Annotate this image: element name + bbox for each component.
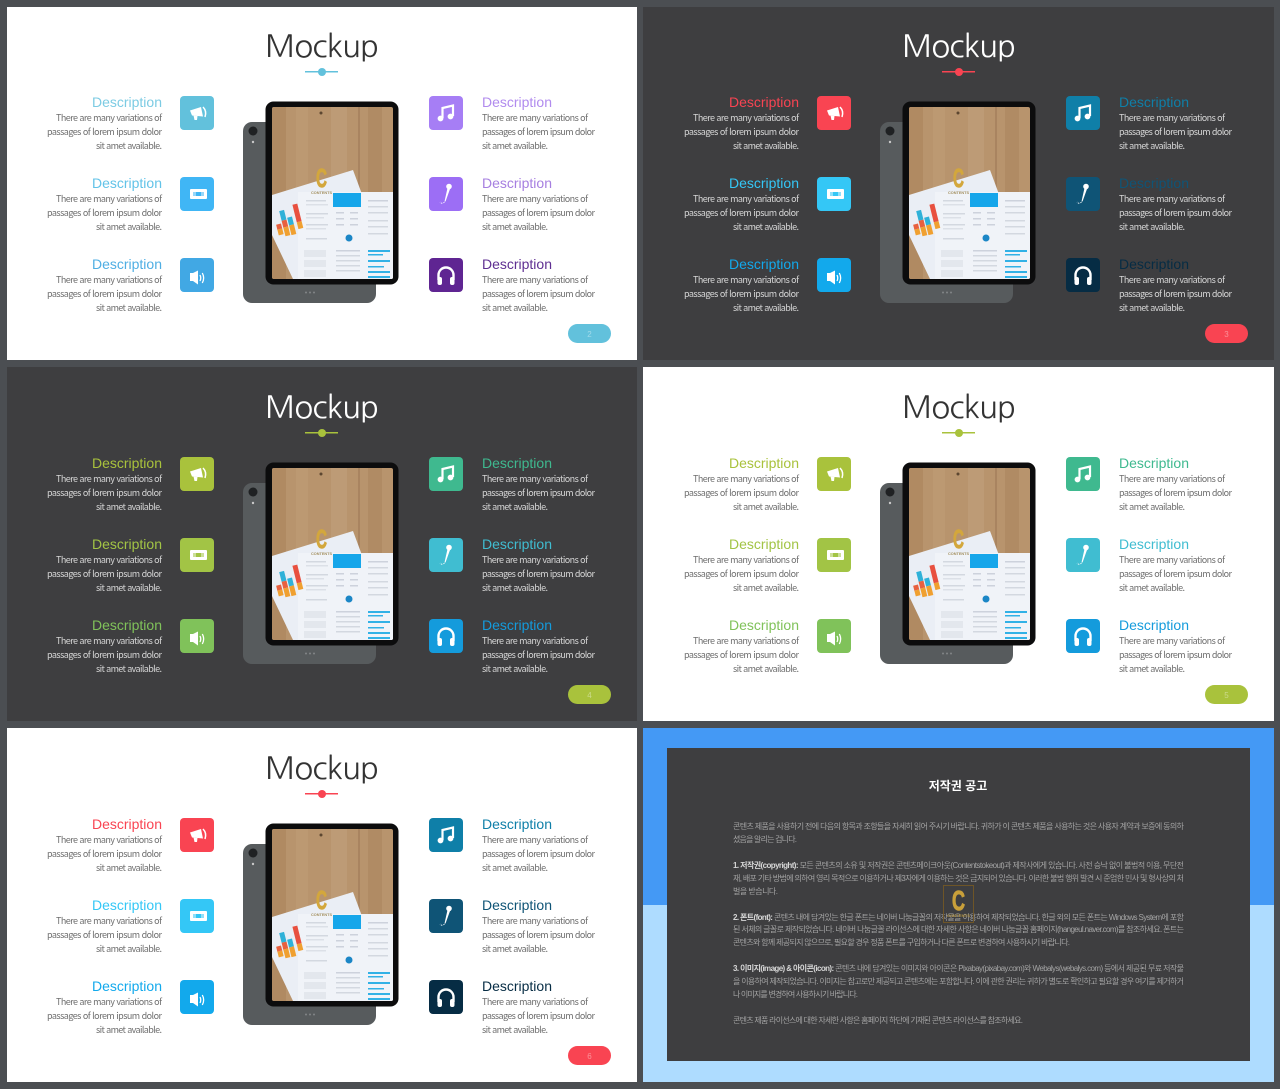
left item 1: sit amet available. [733,500,799,513]
title accent [942,68,975,76]
tablet mockup: C [316,524,327,554]
left item 3: passages of lorem ipsum dolor [47,648,162,661]
page number [1205,685,1248,704]
right item 3: sit amet available. [482,662,548,675]
left item 1: Description [729,455,799,471]
left item 2: Description [729,175,799,191]
icon: headphones [429,980,463,1014]
left item 1: Description [92,455,162,471]
font paragraph: 된 서체의 글꼴로 제작되었습니다. 네이버 나눔글꼴 라이선스에 대한 자세한 사항은 네이버 나눔글꼴 홈페이지(hangeul.naver.com)를 참조하세요. 폰트는 [733,924,1184,934]
tablet mockup: C [316,163,327,193]
right item 1: passages of lorem ipsum dolor [1119,486,1232,499]
right item 1: There are many variations of [1119,472,1226,485]
right item 2: Description [1119,175,1189,191]
left item 1 [684,455,800,513]
right item 2: sit amet available. [1119,581,1185,594]
right item 3 [1119,617,1232,675]
icon: headphones [429,619,463,653]
left item 2: There are many variations of [56,192,163,205]
icon: megaphone [180,818,214,852]
right item 1 [482,816,596,874]
left item 1: There are many variations of [693,472,800,485]
icon: speaker [180,980,214,1014]
left item 2: Description [92,536,162,552]
icon: megaphone [180,96,214,130]
right item 1: sit amet available. [482,500,548,513]
tablet mockup [243,102,398,303]
icon: microphone [429,899,463,933]
left item 1: sit amet available. [96,139,162,152]
icon: music note [429,818,463,852]
right item 1: There are many variations of [1119,111,1226,124]
left item 1: There are many variations of [56,833,163,846]
right item 2: There are many variations of [482,914,589,927]
logo watermark: CONTENTS [947,913,970,918]
left item 1: passages of lorem ipsum dolor [684,125,800,138]
right item 1: Description [482,816,552,832]
right item 2: There are many variations of [1119,192,1226,205]
right item 3: There are many variations of [482,273,589,286]
right item 3: passages of lorem ipsum dolor [482,1009,596,1022]
right item 3 [482,617,596,675]
font paragraph: 콘텐츠와 함께 제공되지 않으므로, 필요할 경우 정품 폰트를 구입하거나 다른 폰트로 변경하여 사용하시기 바랍니다. [733,937,1070,947]
logo watermark: C [952,885,965,916]
tablet mockup: C [953,524,964,554]
panel: slide 5 white green [643,367,1274,721]
right item 3 [482,978,596,1036]
icon: cassette [180,538,214,572]
left item 2 [47,897,163,955]
right item 2: sit amet available. [1119,220,1185,233]
copyright paragraph [733,860,1184,896]
font paragraph [733,912,1185,947]
right item 3: sit amet available. [482,1023,548,1036]
tablet mockup: CONTENTS [948,551,969,556]
left item 2: Description [92,897,162,913]
panel: slide 3 dark red blue [643,7,1274,360]
tablet mockup: CONTENTS [311,190,332,195]
icon: cassette [817,177,851,211]
right item 2 [1119,536,1232,594]
right item 1 [1119,94,1232,152]
right item 1: There are many variations of [482,833,589,846]
right item 1: sit amet available. [482,861,548,874]
icon: speaker [180,258,214,292]
left item 2: sit amet available. [96,220,162,233]
logo watermark [944,885,974,922]
page number [1205,324,1248,343]
right item 2: sit amet available. [482,942,548,955]
right item 2: Description [482,175,552,191]
left item 2 [684,175,800,233]
right item 1: There are many variations of [482,472,589,485]
tablet mockup [243,462,398,664]
left item 2 [47,175,163,233]
right item 1 [1119,455,1232,513]
tablet mockup [880,102,1036,303]
icon: megaphone [817,457,851,491]
right item 3: passages of lorem ipsum dolor [482,287,596,300]
left item 2: passages of lorem ipsum dolor [47,567,162,580]
title: Mockup [265,392,379,423]
icon: headphones [1066,619,1100,653]
left item 1 [47,94,163,152]
icon: music note [1066,96,1100,130]
notice heading: 저작권 공고 [929,778,987,793]
left item 2: passages of lorem ipsum dolor [47,206,162,219]
page number: 4 [587,691,592,700]
left item 1: Description [92,816,162,832]
icon: microphone [429,538,463,572]
icon: speaker [817,258,851,292]
icon: cassette [817,538,851,572]
left item 1: passages of lorem ipsum dolor [684,486,800,499]
left item 3: There are many variations of [56,995,163,1008]
right item 2: Description [482,897,552,913]
title: Mockup [265,753,379,784]
right item 1: Description [482,94,552,110]
right item 2: passages of lorem ipsum dolor [1119,567,1232,580]
tablet mockup: C [316,885,327,915]
copyright paragraph: 재, 배포 기타 방법에 의하여 영리 목적으로 이용하거나 제3자에게 이용하는 것은 금지되어 있습니다. 이러한 불법 행위 발견 시 준엄한 민사 및 형사상의 처 [733,873,1184,883]
left item 1: passages of lorem ipsum dolor [47,125,162,138]
title: Mockup [265,31,379,62]
copyright paragraph: 1. 저작권(copyright): 모든 콘텐츠의 소유 및 저작권은 콘텐츠메이크아웃(Contentstokeout)과 제작사에게 있습니다. 사전 승낙 없이 불법적 이용, 무단전 [733,860,1184,870]
icon: music note [429,96,463,130]
left item 1 [47,455,163,513]
left item 3: Description [92,256,162,272]
left item 2: There are many variations of [693,553,800,566]
right item 3: There are many variations of [482,995,589,1008]
left item 3: passages of lorem ipsum dolor [47,287,162,300]
left item 2: passages of lorem ipsum dolor [684,567,800,580]
right item 2 [482,536,596,594]
intro paragraph: 콘텐츠 제품을 사용하기 전에 다음의 항목과 조항들을 자세히 읽어 주시기 바랍니다. 귀하가 이 콘텐츠 제품을 사용하는 것은 사용자 계약과 보증에 동의하 [733,821,1185,831]
right item 2 [482,175,596,233]
right item 3: Description [1119,256,1189,272]
tablet mockup: C [953,163,964,193]
left item 1 [684,94,800,152]
right item 3 [482,256,596,314]
right item 1: sit amet available. [1119,139,1185,152]
right item 3: sit amet available. [482,301,548,314]
right item 1: passages of lorem ipsum dolor [482,125,596,138]
copyright paragraph: 벌을 받습니다. [733,886,778,896]
left item 2: passages of lorem ipsum dolor [47,928,162,941]
icon: cassette [180,899,214,933]
right item 1 [482,94,596,152]
left item 3: sit amet available. [733,662,799,675]
left item 1: Description [729,94,799,110]
right item 3: sit amet available. [1119,301,1185,314]
left item 1: There are many variations of [56,472,163,485]
image paragraph [733,963,1184,999]
left item 2: sit amet available. [96,942,162,955]
right item 3: Description [1119,617,1189,633]
panel: copyright notice [643,728,1274,1082]
left item 2: passages of lorem ipsum dolor [684,206,800,219]
right item 1: Description [482,455,552,471]
icon: headphones [1066,258,1100,292]
left item 3 [47,617,163,675]
left item 3: sit amet available. [733,301,799,314]
right item 3: There are many variations of [1119,273,1226,286]
right item 1: sit amet available. [1119,500,1185,513]
tablet mockup [243,824,398,1025]
right item 3: There are many variations of [482,634,589,647]
left item 1: There are many variations of [56,111,163,124]
left item 3: Description [92,978,162,994]
icon: speaker [180,619,214,653]
icon: cassette [180,177,214,211]
right item 2: passages of lorem ipsum dolor [1119,206,1232,219]
icon: microphone [1066,177,1100,211]
left item 3: There are many variations of [693,273,800,286]
right item 1: Description [1119,94,1189,110]
page number: 6 [587,1052,592,1061]
left item 3: passages of lorem ipsum dolor [47,1009,162,1022]
icon: megaphone [817,96,851,130]
left item 3: sit amet available. [96,1023,162,1036]
left item 3: sit amet available. [96,662,162,675]
left item 3: There are many variations of [56,273,163,286]
image paragraph: 을 이용하여 제작되었습니다. 이미지는 참고로만 제공되고 콘텐츠에는 포함합니다. 이에 관한 권리는 귀하가 별도로 확인하고 필요할 경우 여기를 제거하거 [733,976,1184,986]
right item 3: Description [482,617,552,633]
left item 2: sit amet available. [733,220,799,233]
left item 2 [47,536,163,594]
left item 2: There are many variations of [56,553,163,566]
title accent [305,68,338,76]
title accent [305,429,338,437]
right item 2: There are many variations of [482,192,589,205]
intro paragraph [733,821,1185,844]
right item 2: passages of lorem ipsum dolor [482,928,596,941]
left item 1: sit amet available. [733,139,799,152]
icon: speaker [817,619,851,653]
left item 1: There are many variations of [693,111,800,124]
right item 2: sit amet available. [482,220,548,233]
right item 3 [1119,256,1232,314]
left item 2: There are many variations of [56,914,163,927]
icon: microphone [1066,538,1100,572]
tablet mockup: CONTENTS [948,190,969,195]
left item 3 [47,256,163,314]
left item 3 [684,256,800,314]
right item 2: sit amet available. [482,581,548,594]
left item 1: sit amet available. [96,500,162,513]
left item 2: sit amet available. [733,581,799,594]
right item 2: passages of lorem ipsum dolor [482,206,596,219]
right item 2 [482,897,596,955]
left item 3: sit amet available. [96,301,162,314]
right item 3: sit amet available. [1119,662,1185,675]
left item 3: Description [92,617,162,633]
right item 1: sit amet available. [482,139,548,152]
right item 1: passages of lorem ipsum dolor [482,847,596,860]
icon: megaphone [180,457,214,491]
right item 1: There are many variations of [482,111,589,124]
page number: 5 [1224,691,1229,700]
right item 3: Description [482,978,552,994]
right item 1: Description [1119,455,1189,471]
page number: 3 [1224,330,1229,339]
license paragraph: 콘텐츠 제품 라이선스에 대한 자세한 사항은 홈페이지 하단에 기재된 콘텐츠 라이선스를 참조하세요. [733,1015,1023,1025]
tablet mockup [880,462,1036,664]
title: Mockup [902,392,1016,423]
right item 3: passages of lorem ipsum dolor [482,648,596,661]
left item 3: passages of lorem ipsum dolor [684,287,800,300]
right item 3: There are many variations of [1119,634,1226,647]
right item 2: Description [482,536,552,552]
intro paragraph: 셨음을 알리는 겁니다. [733,834,797,844]
left item 2 [684,536,800,594]
page number: 2 [587,330,592,339]
left item 1: sit amet available. [96,861,162,874]
left item 3 [684,617,800,675]
page number [568,685,611,704]
right item 2: There are many variations of [482,553,589,566]
icon: headphones [429,258,463,292]
icon: microphone [429,177,463,211]
right item 2: There are many variations of [1119,553,1226,566]
right item 1: passages of lorem ipsum dolor [482,486,596,499]
right item 3: passages of lorem ipsum dolor [1119,648,1232,661]
right item 2: passages of lorem ipsum dolor [482,567,596,580]
right item 3: passages of lorem ipsum dolor [1119,287,1232,300]
right item 2 [1119,175,1232,233]
left item 1: passages of lorem ipsum dolor [47,486,162,499]
left item 3: There are many variations of [56,634,163,647]
panel: slide 4 dark green [7,367,637,721]
title accent [305,790,338,798]
image paragraph: 나 이미지를 변경하여 사용하시기 바랍니다. [733,989,858,999]
tablet mockup: CONTENTS [311,551,332,556]
icon: music note [429,457,463,491]
left item 1 [47,816,163,874]
left item 3 [47,978,163,1036]
right item 2: Description [1119,536,1189,552]
tablet mockup: CONTENTS [311,912,332,917]
left item 1: Description [92,94,162,110]
page number [568,324,611,343]
left item 2: Description [729,536,799,552]
image paragraph: 3. 이미지(image) & 아이콘(icon): 콘텐츠 내에 담겨있는 이미지와 아이콘은 Pixabay(pixabay.com)와 Webalys(webalys.com) 등에서 제공된 무료 저작물 [733,963,1184,973]
title: Mockup [902,31,1016,62]
left item 2: Description [92,175,162,191]
font paragraph: 2. 폰트(font): 콘텐츠 내에 담겨있는 한글 폰트는 네이버 나눔글꼴의 저작물을 이용하여 제작되었습니다. 한글 외의 모든 폰트는 Windows System에 포함 [733,912,1185,922]
panel: slide 6 white red blue [7,728,637,1082]
title accent [942,429,975,437]
left item 3: Description [729,256,799,272]
right item 1: passages of lorem ipsum dolor [1119,125,1232,138]
icon: music note [1066,457,1100,491]
left item 3: Description [729,617,799,633]
panel: slide 2 white sky blue purple [7,7,637,360]
left item 3: passages of lorem ipsum dolor [684,648,800,661]
left item 3: There are many variations of [693,634,800,647]
left item 2: There are many variations of [693,192,800,205]
page number [568,1046,611,1065]
left item 1: passages of lorem ipsum dolor [47,847,162,860]
right item 3: Description [482,256,552,272]
left item 2: sit amet available. [96,581,162,594]
right item 1 [482,455,596,513]
